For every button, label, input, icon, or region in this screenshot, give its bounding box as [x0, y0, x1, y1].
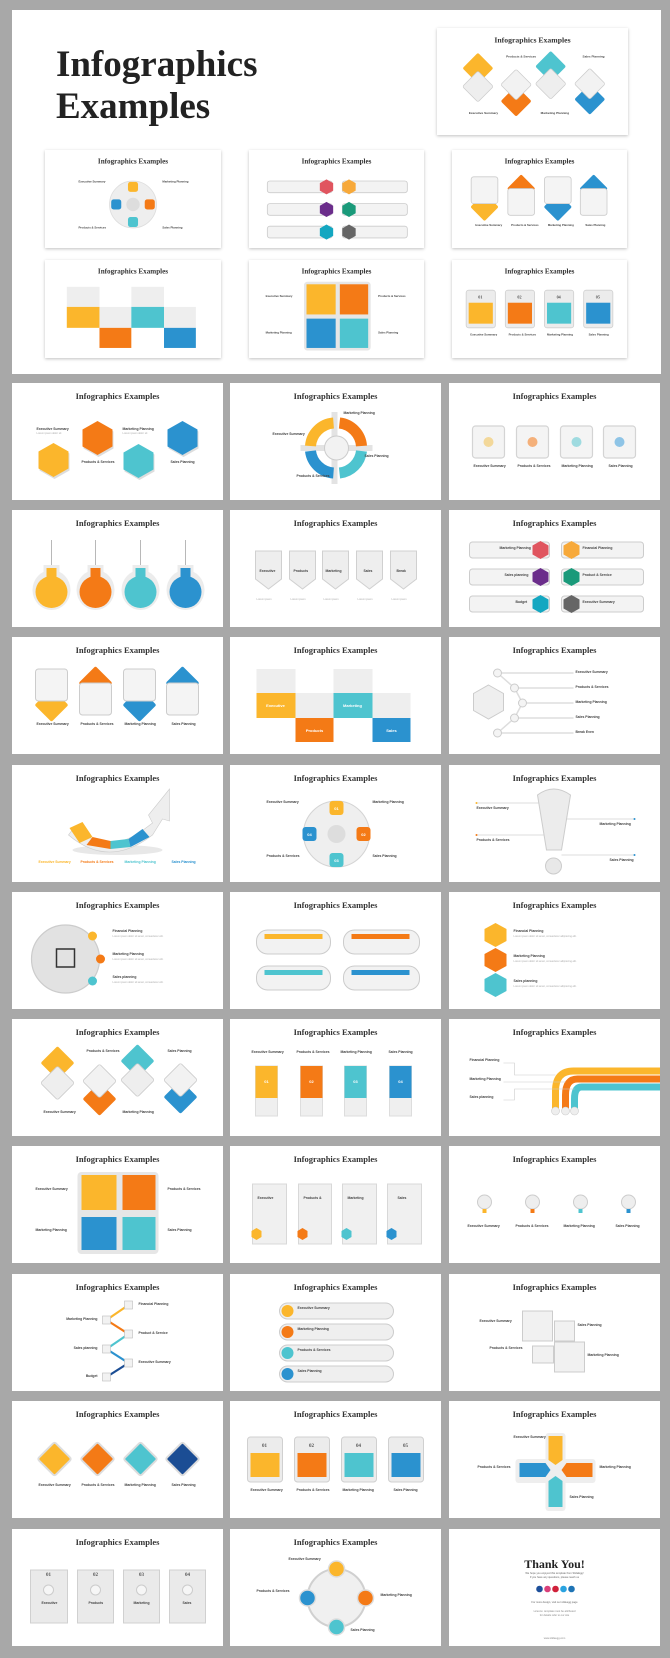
- thumb r10c3: thank you: for details refer to our site: [540, 1613, 570, 1617]
- title: Examples: [56, 86, 210, 127]
- thumb r9c2: numbered cards: 04: [356, 1444, 362, 1449]
- thumb r7c1: 2x2 squares: Executive Summary: [36, 1187, 68, 1191]
- thumb r1c2: ring quadrants: Infographics Examples: [294, 391, 378, 401]
- thumb r10c3: thank you: Licence: template must be attributed: [534, 1609, 576, 1613]
- thumb r6c2: vertical bars: Infographics Examples: [294, 1027, 378, 1037]
- thumb r2c3: hex pills: Marketing Planning: [500, 546, 531, 550]
- thumb r3c3: hex chain: Products & Services: [576, 685, 609, 689]
- title: [56, 44, 257, 127]
- thumb r8c3: overlapping squares: Executive Summary: [480, 1319, 512, 1323]
- thumb r9c3: cross: Infographics Examples: [513, 1409, 597, 1419]
- thumb r1c3: white squares: Executive Summary: [474, 464, 506, 468]
- thumb: numbered cards: Sales Planning: [589, 332, 609, 336]
- thumb r10c2: ring with circles: Marketing Planning: [380, 1593, 412, 1597]
- thumb r5c3: stacked hexes: Lorem ipsum dolor sit amet, consectetur adipiscing elit.: [514, 984, 577, 988]
- thumb r9c2: numbered cards: [230, 1401, 441, 1518]
- thumb r4c1: arrow: Sales Planning: [172, 860, 196, 864]
- thumb r7c1: 2x2 squares: Marketing Planning: [36, 1228, 67, 1232]
- thumb r2c1: bulbs: [12, 510, 223, 627]
- thumb r10c1: grey cards: 03: [139, 1573, 144, 1578]
- thumb r5c3: stacked hexes: Lorem ipsum dolor sit amet, consectetur adipiscing elit.: [514, 934, 577, 938]
- thumb r9c1: colored diamonds: Sales Planning: [172, 1483, 196, 1487]
- thumb r2c2: shields: Products: [294, 569, 308, 573]
- thumb: numbered cards: 01: [478, 295, 482, 300]
- thumb r10c3: thank you: If you have any questions, please reach us: [530, 1575, 580, 1579]
- thumb: top-right diamonds: Products & Services: [506, 54, 536, 58]
- thumb r2c2: shields: Lorem ipsum: [324, 597, 338, 601]
- thumb r3c3: hex chain: Break Even: [576, 730, 594, 734]
- thumb r1c3: white squares: Sales Planning: [608, 464, 633, 468]
- thumb r4c2: circle numbered: 02: [361, 832, 366, 837]
- thumb r4c3: exclamation: Marketing Planning: [600, 822, 631, 826]
- thumb r10c1: grey cards: [12, 1529, 223, 1646]
- thumb r3c1: diamonds + squares: Infographics Examples: [76, 645, 160, 655]
- thumb r3c1: diamonds + squares: Executive Summary: [36, 722, 69, 726]
- thumb: circle segments: [45, 150, 221, 248]
- thumb r4c2: circle numbered: Products & Services: [266, 854, 300, 858]
- thumb r4c1: arrow: [12, 765, 223, 882]
- thumb: 2x2 squares: Products & Services: [378, 294, 406, 298]
- thumb r9c3: cross: Sales Planning: [570, 1495, 594, 1499]
- thumb r7c3: small bulbs: Products & Services: [516, 1224, 549, 1228]
- thumb r2c3: hex pills: Executive Summary: [582, 600, 615, 604]
- thumb r5c3: stacked hexes: Lorem ipsum dolor sit amet, consectetur adipiscing elit.: [514, 959, 577, 963]
- thumb r6c2: vertical bars: Sales Planning: [388, 1050, 413, 1054]
- thumb: diamonds squares: [452, 150, 627, 248]
- thumb r2c1: bulbs: Infographics Examples: [76, 518, 160, 528]
- thumb r6c3: curved bands: Sales planning: [470, 1095, 493, 1099]
- thumb r7c1: 2x2 squares: [12, 1146, 223, 1263]
- thumb r6c2: vertical bars: 04: [398, 1079, 403, 1084]
- thumb r4c3: exclamation: Infographics Examples: [513, 773, 597, 783]
- thumb r1c1: hexagons: Sales Planning: [170, 460, 195, 464]
- thumb r1c3: white squares: Marketing Planning: [562, 464, 593, 468]
- thumb r8c1: zigzag timeline: Budget: [86, 1374, 98, 1378]
- thumb r2c3: hex pills: Budget: [516, 600, 528, 604]
- thumb r3c3: hex chain: Infographics Examples: [513, 645, 597, 655]
- thumb r3c3: hex chain: [449, 637, 660, 754]
- thumb r1c2: ring quadrants: Products & Services: [296, 474, 330, 478]
- thumb: blocks: Infographics Examples: [98, 267, 168, 275]
- thumb r10c2: ring with circles: Executive Summary: [288, 1557, 321, 1561]
- thumb r3c1: diamonds + squares: [12, 637, 223, 754]
- thumb r7c2: cards with hexes: Products &: [304, 1196, 322, 1200]
- thumb r7c2: cards with hexes: Executive: [258, 1196, 273, 1200]
- thumb: numbered cards: 04: [557, 295, 561, 300]
- thumb r1c2: ring quadrants: Marketing Planning: [344, 411, 375, 415]
- thumb: diamonds squares: Executive Summary: [475, 223, 503, 227]
- thumb r2c3: hex pills: [449, 510, 660, 627]
- thumb r10c3: thank you: Thank You!: [524, 1557, 585, 1571]
- thumb r7c2: cards with hexes: Marketing: [348, 1196, 364, 1200]
- thumb r4c3: exclamation: Sales Planning: [610, 858, 634, 862]
- thumb: diamonds squares: Marketing Planning: [548, 223, 574, 227]
- thumb r2c2: shields: Sales: [364, 569, 372, 573]
- thumb r8c3: overlapping squares: Marketing Planning: [588, 1353, 619, 1357]
- thumb r8c2: stacked pills: Executive Summary: [298, 1306, 330, 1310]
- thumb r9c3: cross: Executive Summary: [514, 1435, 546, 1439]
- thumb r3c2: blocks: Sales: [386, 728, 398, 733]
- thumb r4c2: circle numbered: Marketing Planning: [372, 800, 404, 804]
- thumb: hex pills: Infographics Examples: [302, 157, 372, 165]
- thumb r9c2: numbered cards: Sales Planning: [394, 1488, 418, 1492]
- thumb r3c2: blocks: Infographics Examples: [294, 645, 378, 655]
- thumb r6c2: vertical bars: Marketing Planning: [340, 1050, 372, 1054]
- thumb r1c1: hexagons: Products & Services: [82, 460, 115, 464]
- thumb r5c1: big circle: Lorem ipsum dolor sit amet, consectetur elit.: [112, 934, 164, 938]
- thumb r7c1: 2x2 squares: Products & Services: [168, 1187, 201, 1191]
- thumb r8c3: overlapping squares: [449, 1274, 660, 1391]
- thumb r1c1: hexagons: Marketing Planning: [122, 427, 154, 431]
- thumb r5c1: big circle: Lorem ipsum dolor sit amet, consectetur elit.: [112, 980, 164, 984]
- thumb r6c1: diamonds zigzag: Products & Services: [86, 1049, 120, 1053]
- thumb r8c2: stacked pills: [230, 1274, 441, 1391]
- thumb r8c1: zigzag timeline: Marketing Planning: [66, 1317, 98, 1321]
- thumb r6c3: curved bands: Marketing Planning: [470, 1077, 501, 1081]
- thumb r1c2: ring quadrants: Executive Summary: [272, 432, 305, 436]
- thumb: circle segments: Sales Planning: [162, 226, 183, 230]
- thumb r10c1: grey cards: Executive: [42, 1601, 57, 1605]
- thumb r9c1: colored diamonds: Executive Summary: [38, 1483, 71, 1487]
- thumb r10c1: grey cards: 04: [185, 1573, 190, 1578]
- thumb r9c3: cross: [449, 1401, 660, 1518]
- thumb r7c3: small bulbs: Infographics Examples: [513, 1154, 597, 1164]
- thumb r5c3: stacked hexes: Marketing Planning: [514, 954, 545, 958]
- thumb: circle segments: Infographics Examples: [98, 157, 168, 165]
- thumb: circle segments: Executive Summary: [79, 180, 106, 184]
- thumb r10c2: ring with circles: Sales Planning: [350, 1628, 375, 1632]
- thumb: top-right diamonds: Infographics Examples: [494, 36, 571, 45]
- thumb: top-right diamonds: Sales Planning: [583, 54, 605, 58]
- thumb r9c2: numbered cards: Products & Services: [296, 1488, 330, 1492]
- thumb r2c2: shields: Lorem ipsum: [358, 597, 372, 601]
- thumb r9c2: numbered cards: 01: [262, 1444, 268, 1449]
- thumb r6c3: curved bands: Infographics Examples: [513, 1027, 597, 1037]
- thumb r9c2: numbered cards: Marketing Planning: [342, 1488, 374, 1492]
- thumb r3c2: blocks: Products: [306, 728, 324, 733]
- thumb r8c3: overlapping squares: Products & Services: [490, 1346, 523, 1350]
- thumb r1c3: white squares: [449, 383, 660, 500]
- thumb r8c1: zigzag timeline: Sales planning: [74, 1346, 98, 1350]
- thumb r3c1: diamonds + squares: Sales Planning: [172, 722, 196, 726]
- thumb: numbered cards: Infographics Examples: [505, 267, 575, 275]
- thumb r2c3: hex pills: Financial Planning: [582, 546, 612, 550]
- thumb r9c2: numbered cards: Executive Summary: [250, 1488, 283, 1492]
- thumb r4c1: arrow: Executive Summary: [38, 860, 71, 864]
- thumb r1c1: hexagons: Lorem ipsum dolor sit: [122, 431, 148, 435]
- thumb r5c1: big circle: Marketing Planning: [112, 952, 144, 956]
- thumb r4c3: exclamation: Executive Summary: [476, 806, 509, 810]
- thumb r9c2: numbered cards: Infographics Examples: [294, 1409, 378, 1419]
- thumb r3c1: diamonds + squares: Products & Services: [80, 722, 114, 726]
- thumb r2c3: hex pills: Sales planning: [504, 573, 528, 577]
- thumb: 2x2 squares: Sales Planning: [378, 331, 399, 335]
- thumb: top-right diamonds: [437, 28, 628, 135]
- thumb r4c3: exclamation: [449, 765, 660, 882]
- thumb r9c3: cross: Products & Services: [478, 1465, 511, 1469]
- thumb: numbered cards: Marketing Planning: [547, 332, 573, 336]
- thumb r5c2: pills: [230, 892, 441, 1009]
- thumb r6c2: vertical bars: [230, 1019, 441, 1136]
- thumb r9c3: cross: Marketing Planning: [600, 1465, 631, 1469]
- thumb r6c2: vertical bars: 03: [353, 1079, 358, 1084]
- thumb r5c3: stacked hexes: [449, 892, 660, 1009]
- thumb r10c3: thank you: We hope you enjoyed this template from SlideEgg!: [525, 1571, 584, 1575]
- thumb r2c2: shields: Lorem ipsum: [392, 597, 406, 601]
- thumb r7c2: cards with hexes: [230, 1146, 441, 1263]
- thumb r3c2: blocks: [230, 637, 441, 754]
- thumb: numbered cards: Products & Services: [509, 332, 537, 336]
- thumb r4c2: circle numbered: Executive Summary: [266, 800, 299, 804]
- thumb r5c1: big circle: Sales planning: [112, 975, 136, 979]
- thumb r6c2: vertical bars: 02: [309, 1079, 314, 1084]
- thumb: diamonds squares: Infographics Examples: [505, 157, 575, 165]
- thumb r8c1: zigzag timeline: Financial Planning: [138, 1302, 168, 1306]
- thumb r4c1: arrow: Products & Services: [80, 860, 114, 864]
- thumb r6c1: diamonds zigzag: Marketing Planning: [122, 1110, 154, 1114]
- thumb: blocks: [45, 260, 221, 358]
- thumb r10c2: ring with circles: Infographics Examples: [294, 1537, 378, 1547]
- thumb r2c2: shields: [230, 510, 441, 627]
- thumb r8c1: zigzag timeline: Product & Service: [138, 1331, 168, 1335]
- thumb r1c2: ring quadrants: Sales Planning: [364, 454, 389, 458]
- thumb: circle segments: Marketing Planning: [162, 180, 189, 184]
- thumb r6c3: curved bands: Financial Planning: [470, 1058, 499, 1062]
- thumb r9c2: numbered cards: 02: [309, 1444, 314, 1449]
- thumb r3c2: blocks: Marketing: [343, 703, 362, 708]
- thumb r5c3: stacked hexes: Financial Planning: [514, 929, 543, 933]
- thumb r7c3: small bulbs: Marketing Planning: [564, 1224, 595, 1228]
- thumb r5c3: stacked hexes: Sales planning: [514, 979, 537, 983]
- thumb r7c3: small bulbs: Sales Planning: [616, 1224, 640, 1228]
- thumb: top-right diamonds: Marketing Planning: [541, 111, 569, 115]
- thumb r4c3: exclamation: Products & Services: [476, 838, 510, 842]
- thumb r6c3: curved bands: [449, 1019, 660, 1136]
- thumb r5c1: big circle: [12, 892, 223, 1009]
- thumb: diamonds squares: Products & Services: [511, 223, 539, 227]
- thumb r10c1: grey cards: Products: [88, 1601, 103, 1605]
- thumb r7c2: cards with hexes: Sales: [398, 1196, 406, 1200]
- thumb r2c3: hex pills: Product & Service: [582, 573, 612, 577]
- thumb r1c1: hexagons: Infographics Examples: [76, 391, 160, 401]
- thumb r8c2: stacked pills: Infographics Examples: [294, 1282, 378, 1292]
- thumb r9c2: numbered cards: 05: [403, 1444, 408, 1449]
- thumb r9c1: colored diamonds: Marketing Planning: [124, 1483, 156, 1487]
- thumb r1c2: ring quadrants: [230, 383, 441, 500]
- thumb r7c3: small bulbs: Executive Summary: [468, 1224, 500, 1228]
- thumb r10c2: ring with circles: Products & Services: [256, 1589, 290, 1593]
- thumb r6c2: vertical bars: Products & Services: [296, 1050, 330, 1054]
- thumb: 2x2 squares: Marketing Planning: [266, 331, 292, 335]
- thumb r10c1: grey cards: 01: [46, 1573, 52, 1578]
- thumb r2c2: shields: Infographics Examples: [294, 518, 378, 528]
- thumb r7c2: cards with hexes: Infographics Examples: [294, 1154, 378, 1164]
- thumb r1c3: white squares: Infographics Examples: [513, 391, 597, 401]
- thumb: diamonds squares: Sales Planning: [585, 223, 606, 227]
- thumb r8c1: zigzag timeline: [12, 1274, 223, 1391]
- thumb r8c2: stacked pills: Sales Planning: [298, 1369, 322, 1373]
- thumb r8c1: zigzag timeline: Executive Summary: [138, 1360, 171, 1364]
- thumb r10c3: thank you: For more design, visit our slideegg page: [531, 1600, 578, 1604]
- thumb r3c1: diamonds + squares: Marketing Planning: [124, 722, 156, 726]
- thumb r8c3: overlapping squares: Infographics Examples: [513, 1282, 597, 1292]
- thumb r4c2: circle numbered: 04: [307, 832, 312, 837]
- thumb: hex pills: [249, 150, 424, 248]
- thumb r2c3: hex pills: Infographics Examples: [513, 518, 597, 528]
- thumb: numbered cards: 02: [517, 295, 522, 300]
- thumb r4c2: circle numbered: [230, 765, 441, 882]
- thumb r2c2: shields: Lorem ipsum: [256, 597, 272, 601]
- thumb r6c1: diamonds zigzag: Sales Planning: [168, 1049, 192, 1053]
- thumb r2c2: shields: Executive: [260, 569, 275, 573]
- thumb r7c1: 2x2 squares: Sales Planning: [168, 1228, 192, 1232]
- thumb r6c1: diamonds zigzag: [12, 1019, 223, 1136]
- thumb r10c1: grey cards: Marketing: [134, 1601, 150, 1605]
- thumb r6c2: vertical bars: Executive Summary: [252, 1050, 284, 1054]
- thumb r5c1: big circle: Financial Planning: [112, 929, 142, 933]
- thumb r6c1: diamonds zigzag: Executive Summary: [44, 1110, 76, 1114]
- thumb r8c3: overlapping squares: Sales Planning: [578, 1323, 602, 1327]
- thumb: 2x2 squares: Infographics Examples: [302, 267, 372, 275]
- thumb r7c3: small bulbs: [449, 1146, 660, 1263]
- thumb r3c3: hex chain: Marketing Planning: [576, 700, 607, 704]
- thumb: circle segments: Products & Services: [79, 226, 106, 230]
- thumb r3c3: hex chain: Executive Summary: [576, 670, 608, 674]
- thumb r4c2: circle numbered: 03: [334, 858, 339, 863]
- thumb r5c1: big circle: Lorem ipsum dolor sit amet, consectetur elit.: [112, 957, 164, 961]
- thumb r2c2: shields: Break: [396, 569, 406, 573]
- thumb r5c3: stacked hexes: Infographics Examples: [513, 900, 597, 910]
- thumb r6c1: diamonds zigzag: Infographics Examples: [76, 1027, 160, 1037]
- thumb r1c1: hexagons: Executive Summary: [36, 427, 69, 431]
- thumb r7c1: 2x2 squares: Infographics Examples: [76, 1154, 160, 1164]
- thumb r4c2: circle numbered: Sales Planning: [372, 854, 397, 858]
- thumb r10c2: ring with circles: [230, 1529, 441, 1646]
- thumb r4c2: circle numbered: Infographics Examples: [294, 773, 378, 783]
- thumb r8c1: zigzag timeline: Infographics Examples: [76, 1282, 160, 1292]
- thumb: numbered cards: Executive Summary: [470, 332, 498, 336]
- thumb r4c2: circle numbered: 01: [334, 806, 339, 811]
- thumb r10c3: thank you: www.slideegg.com: [544, 1636, 565, 1640]
- title: Infographics: [56, 44, 257, 85]
- thumb r1c3: white squares: Products & Services: [518, 464, 551, 468]
- thumb: numbered cards: [452, 260, 627, 358]
- thumb r9c1: colored diamonds: [12, 1401, 223, 1518]
- thumb r1c1: hexagons: [12, 383, 223, 500]
- thumb: numbered cards: 05: [596, 295, 600, 300]
- thumb: 2x2 squares: Executive Summary: [266, 294, 293, 298]
- thumb r5c1: big circle: Infographics Examples: [76, 900, 160, 910]
- thumb r8c2: stacked pills: Marketing Planning: [298, 1327, 329, 1331]
- thumb r8c2: stacked pills: Products & Services: [298, 1348, 331, 1352]
- thumb r4c1: arrow: Marketing Planning: [124, 860, 156, 864]
- thumb r3c2: blocks: Executive: [266, 703, 286, 708]
- thumb r9c1: colored diamonds: Infographics Examples: [76, 1409, 160, 1419]
- thumb r10c1: grey cards: Sales: [182, 1601, 191, 1605]
- thumb: 2x2 squares: [249, 260, 424, 358]
- thumb r4c1: arrow: Infographics Examples: [76, 773, 160, 783]
- thumb r6c2: vertical bars: 01: [264, 1079, 269, 1084]
- thumb r2c2: shields: Lorem ipsum: [290, 597, 306, 601]
- thumb r10c3: thank you: [449, 1529, 660, 1646]
- thumb r9c1: colored diamonds: Products & Services: [82, 1483, 115, 1487]
- thumb r2c2: shields: Marketing: [326, 569, 342, 573]
- thumb r10c1: grey cards: Infographics Examples: [76, 1537, 160, 1547]
- thumb r1c1: hexagons: Lorem ipsum dolor sit: [36, 431, 62, 435]
- thumb r3c3: hex chain: Sales Planning: [576, 715, 600, 719]
- thumb: top-right diamonds: Executive Summary: [469, 111, 498, 115]
- thumb r10c1: grey cards: 02: [93, 1573, 98, 1578]
- thumb r5c2: pills: Infographics Examples: [294, 900, 378, 910]
- panel: top intro: [12, 10, 661, 374]
